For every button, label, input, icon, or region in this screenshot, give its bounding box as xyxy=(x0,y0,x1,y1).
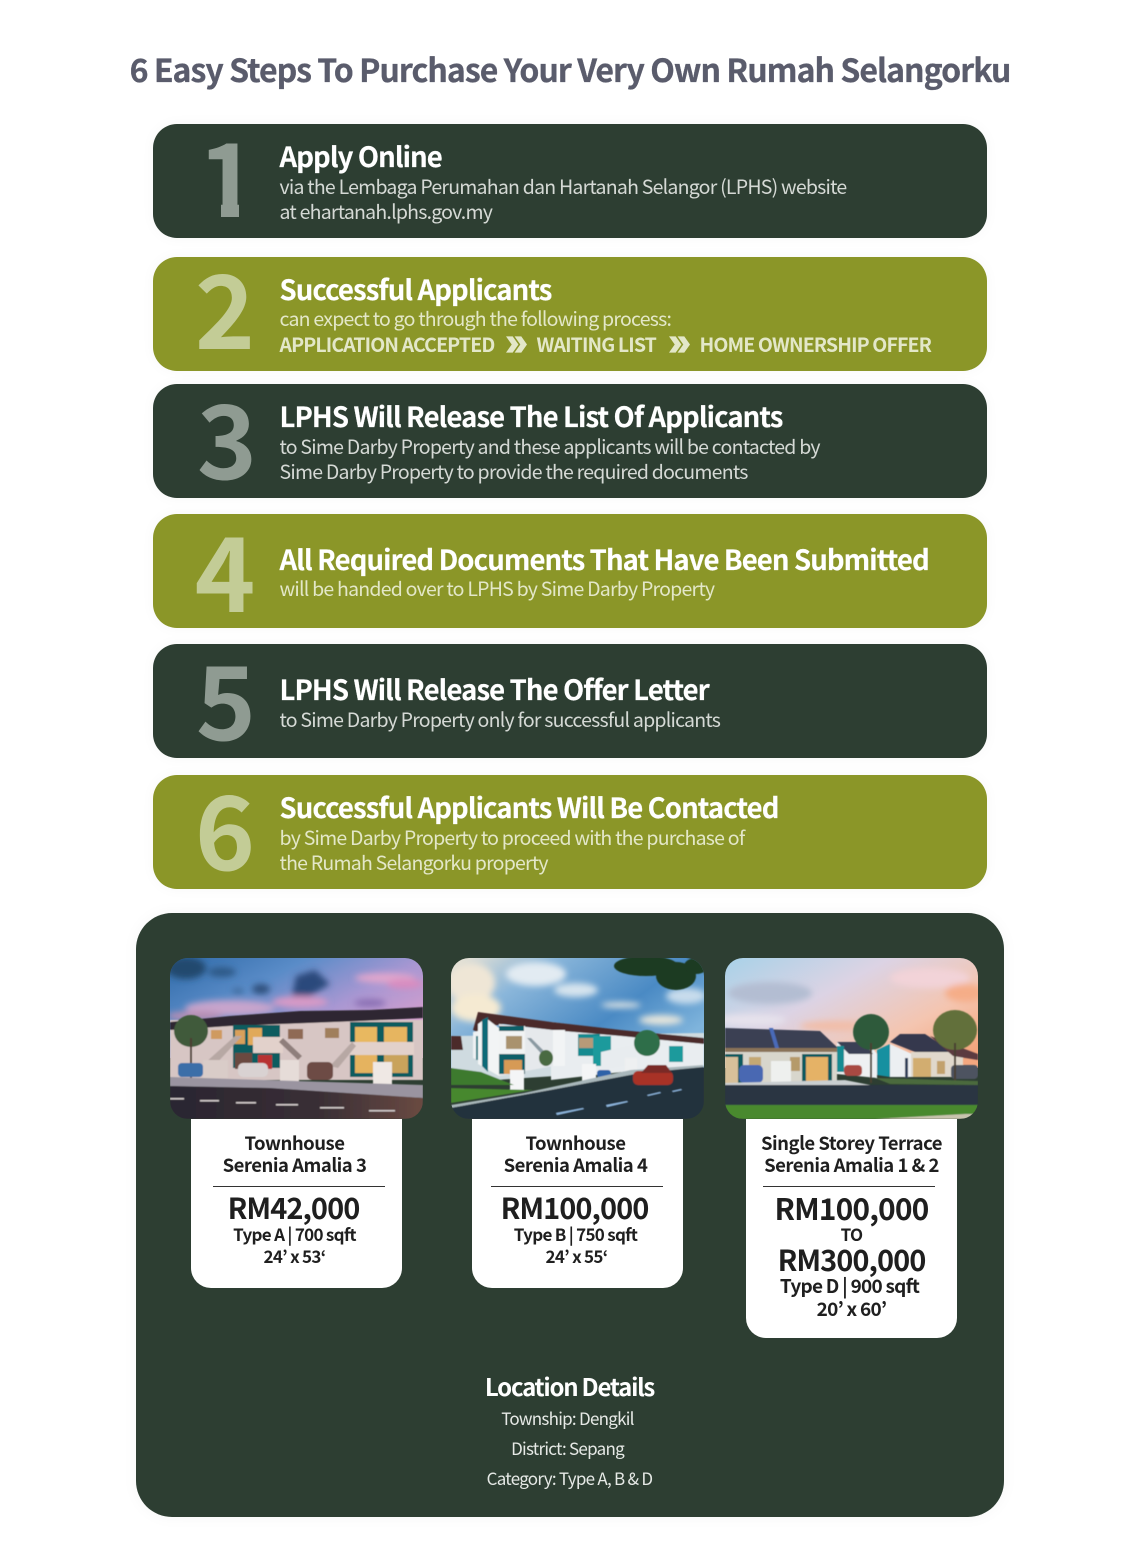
panel: step 1 apply online xyxy=(153,124,987,238)
panel: step 3 list of applicants xyxy=(153,384,987,498)
step 1 description: via the Lembaga Perumahan dan Hartanah Selangor (LPHS) website xyxy=(280,171,846,200)
card: Serenia Amalia 4 xyxy=(472,1119,683,1288)
image: Serenia Amalia 1 and 2 single storey terrace at sunset xyxy=(725,958,978,1119)
step 3 description: to Sime Darby Property and these applicants will be contacted by xyxy=(280,431,820,460)
image: Serenia Amalia 4 townhouse in daylight xyxy=(451,958,704,1119)
property name xyxy=(504,1130,648,1178)
location details heading: Location Details xyxy=(485,1368,654,1403)
application process flow: APPLICATION ACCEPTED xyxy=(280,329,494,358)
panel: step 4 documents submitted xyxy=(153,514,987,628)
lot dimensions: 24’ x 55‘ xyxy=(546,1243,607,1268)
step 3 heading: LPHS Will Release The List Of Applicants xyxy=(280,394,782,434)
type and size: Type B | 750 sqft xyxy=(514,1221,637,1246)
price: RM100,000 xyxy=(501,1186,648,1228)
location details text: Township: Dengkil xyxy=(501,1405,634,1430)
application process flow: WAITING LIST xyxy=(536,329,656,358)
property name: Serenia Amalia 1 & 2 xyxy=(764,1152,939,1178)
step 6 description: the Rumah Selangorku property xyxy=(280,847,548,876)
step 3 description xyxy=(280,431,820,485)
price from: RM100,000 xyxy=(775,1185,928,1229)
card: Serenia Amalia 3 xyxy=(191,1119,402,1288)
card: Serenia Amalia 1 and 2 xyxy=(746,1119,957,1338)
step number 3: 3 xyxy=(197,362,257,509)
step number 4: 4 xyxy=(195,493,255,642)
property name: Townhouse xyxy=(244,1130,344,1156)
step 1 heading: Apply Online xyxy=(280,135,442,175)
step 6 description: by Sime Darby Property to proceed with the purchase of xyxy=(280,822,744,851)
divider xyxy=(491,1186,663,1187)
lot dimensions: 20’ x 60’ xyxy=(817,1295,886,1322)
step 6 heading: Successful Applicants Will Be Contacted xyxy=(280,786,779,826)
image: Serenia Amalia 3 townhouse at dusk xyxy=(170,958,423,1119)
step 2 description: can expect to go through the following process: xyxy=(280,303,671,332)
property name: Serenia Amalia 3 xyxy=(223,1152,366,1178)
to label: TO xyxy=(841,1221,862,1246)
price to: RM300,000 xyxy=(778,1238,925,1280)
type and size: Type A | 700 sqft xyxy=(233,1221,356,1246)
location details text: Category: Type A, B & D xyxy=(487,1465,652,1490)
step 3 description: Sime Darby Property to provide the required documents xyxy=(280,456,748,485)
property name xyxy=(761,1130,942,1178)
divider xyxy=(213,1186,385,1187)
location details text xyxy=(487,1405,652,1490)
property name xyxy=(223,1130,366,1178)
title: 6 Easy Steps To Purchase Your Very Own Rumah Selangorku xyxy=(130,46,1010,92)
panel: step 6 applicants contacted xyxy=(153,775,987,889)
step 1 description xyxy=(280,171,846,225)
lot dimensions: 24’ x 53‘ xyxy=(264,1243,325,1268)
price: RM42,000 xyxy=(228,1186,359,1228)
panel: step 5 offer letter xyxy=(153,644,987,758)
step number 6: 6 xyxy=(195,753,255,900)
step 5 heading: LPHS Will Release The Offer Letter xyxy=(280,668,709,708)
divider xyxy=(763,1186,935,1187)
step 4 description: will be handed over to LPHS by Sime Darby Property xyxy=(280,573,714,602)
panel: step 2 successful applicants xyxy=(153,257,987,371)
property name: Serenia Amalia 4 xyxy=(504,1152,647,1178)
step number 1: 1 xyxy=(198,100,258,247)
application process flow: HOME OWNERSHIP OFFER xyxy=(700,329,931,358)
step 6 description xyxy=(280,822,746,876)
panel: property listing background xyxy=(136,913,1004,1517)
application process flow xyxy=(280,329,932,358)
property name: Townhouse xyxy=(526,1130,626,1156)
location details text: District: Sepang xyxy=(511,1435,624,1460)
type and size: Type D | 900 sqft xyxy=(780,1272,919,1299)
step 5 description: to Sime Darby Property only for successful applicants xyxy=(280,704,720,733)
step 2 heading: Successful Applicants xyxy=(280,268,551,308)
step number 2: 2 xyxy=(195,232,255,379)
step 4 heading: All Required Documents That Have Been Submitted xyxy=(280,538,929,578)
step 1 description: at ehartanah.lphs.gov.my xyxy=(280,196,492,225)
property name: Single Storey Terrace xyxy=(761,1130,942,1156)
step number 5: 5 xyxy=(196,623,256,770)
